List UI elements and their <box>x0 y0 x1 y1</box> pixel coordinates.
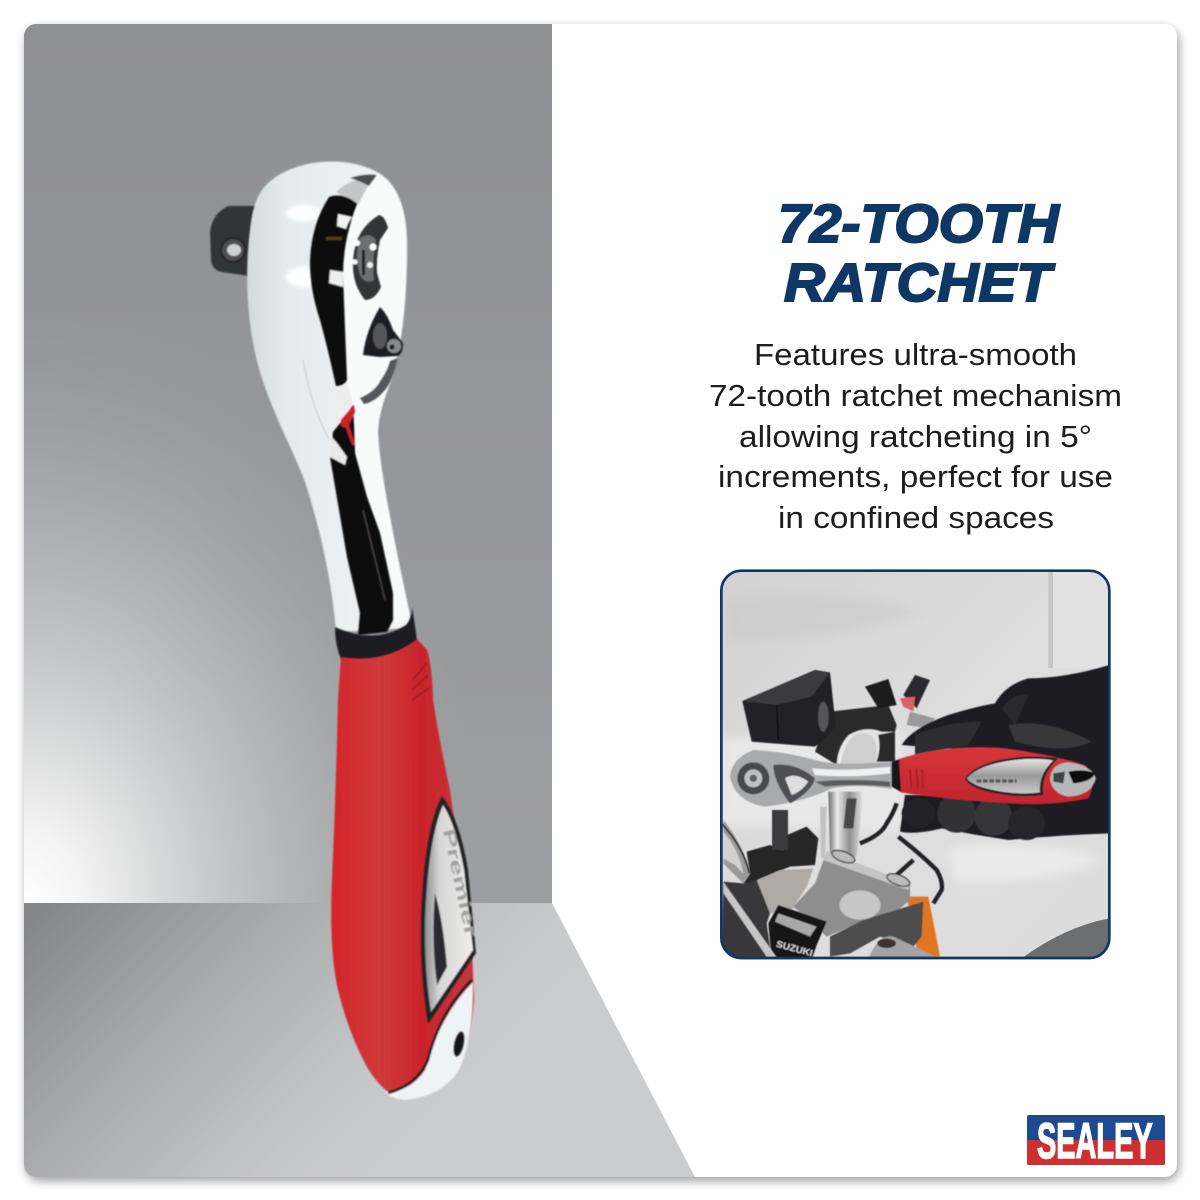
body text: increments, perfect for use <box>718 459 1113 494</box>
workshop wall <box>721 571 1109 959</box>
key fob text: SUZUKI <box>775 939 814 958</box>
heading: 72-TOOTH <box>778 194 1060 254</box>
ratchet socket opening <box>352 215 388 300</box>
body text <box>709 337 1122 535</box>
chrome badge plate <box>421 796 481 1024</box>
panel: grey studio backdrop <box>24 24 695 1177</box>
logo wordmark: SEALEY <box>1037 1113 1153 1169</box>
direction lever <box>363 307 403 357</box>
brake reservoir and clamp <box>742 670 935 765</box>
body text: 72-tooth ratchet mechanism <box>709 378 1122 413</box>
body text: allowing ratcheting in 5° <box>739 419 1092 454</box>
product image: ratchet <box>210 162 481 1100</box>
square drive <box>210 206 256 276</box>
chrome head and shaft <box>247 162 412 632</box>
chrome handlebar <box>820 733 877 858</box>
badge text: Premier <box>439 827 481 939</box>
body text: Features ultra-smooth <box>754 337 1077 372</box>
ratchet in photo <box>730 747 1096 807</box>
heading <box>778 194 1060 313</box>
photo border <box>721 571 1109 958</box>
head highlights <box>286 205 322 287</box>
backdrop wall <box>24 24 552 903</box>
heading: RATCHET <box>784 253 1055 313</box>
logo background <box>1027 1115 1165 1165</box>
backdrop floor <box>24 903 695 1177</box>
red rubber grip <box>331 639 474 1098</box>
logo: SEALEY <box>1027 1113 1165 1169</box>
chrome butt cap <box>385 980 473 1100</box>
photo: ratchet in use on motorcycle <box>721 571 1109 959</box>
black gloved hand <box>900 665 1109 840</box>
dark chrome reflection <box>310 196 393 635</box>
chrome crescent slot <box>360 358 398 404</box>
black ferrule <box>335 607 417 660</box>
lower yoke and keys <box>721 848 942 959</box>
body text: in confined spaces <box>778 500 1054 535</box>
cables <box>780 803 942 903</box>
mirror and chrome at left <box>721 820 778 959</box>
dark engine mass <box>743 827 818 885</box>
